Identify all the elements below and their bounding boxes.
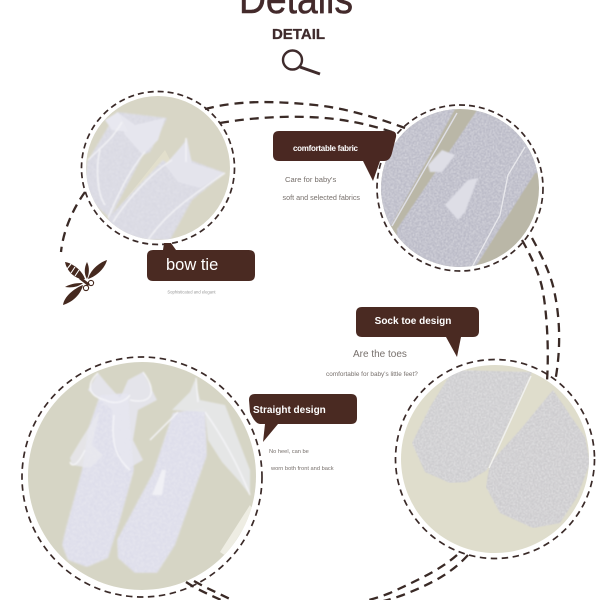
text: worn both front and back: worn both front and back <box>270 466 334 472</box>
text: are the toes: Are the toes <box>353 349 407 360</box>
icon: magnifier <box>283 50 320 74</box>
photo circle: sock toe design <box>396 360 594 558</box>
photo circle: comfortable fabric <box>376 104 544 272</box>
text: comfortable for baby's little feet: comfortable for baby's little feet? <box>326 371 418 378</box>
dashed connector: lower left double arc <box>186 581 232 600</box>
dashed connector: lower right double arc <box>360 555 468 600</box>
icon: insect <box>63 260 107 305</box>
callout: comfortable fabric: comfortable fabric <box>293 144 359 153</box>
callout: bow tie: bow tie <box>166 256 218 274</box>
callout: sock toe design: Sock toe design <box>375 316 451 327</box>
callout: straight design: Straight design <box>253 405 326 416</box>
callout: comfortable fabric <box>273 131 396 181</box>
photo circle: straight design <box>22 357 262 597</box>
callout: bow tie <box>147 243 255 281</box>
text: care for baby's: Care for baby's <box>285 175 336 184</box>
subtitle: DETAIL <box>272 26 325 43</box>
dashed connector: left arc to insect <box>61 192 85 252</box>
dashed connector: right double arc <box>522 238 559 382</box>
callout: sock toe design <box>356 307 479 357</box>
dashed connector: top double arc <box>205 102 405 132</box>
text: no heel: No heel, can be <box>269 449 309 455</box>
photo circle: bow tie <box>80 90 240 250</box>
callout: straight design <box>249 394 357 442</box>
text: soft and selected fabrics: soft and selected fabrics <box>282 193 360 202</box>
caption: bow tie: Sophisticated and elegant <box>167 290 216 294</box>
